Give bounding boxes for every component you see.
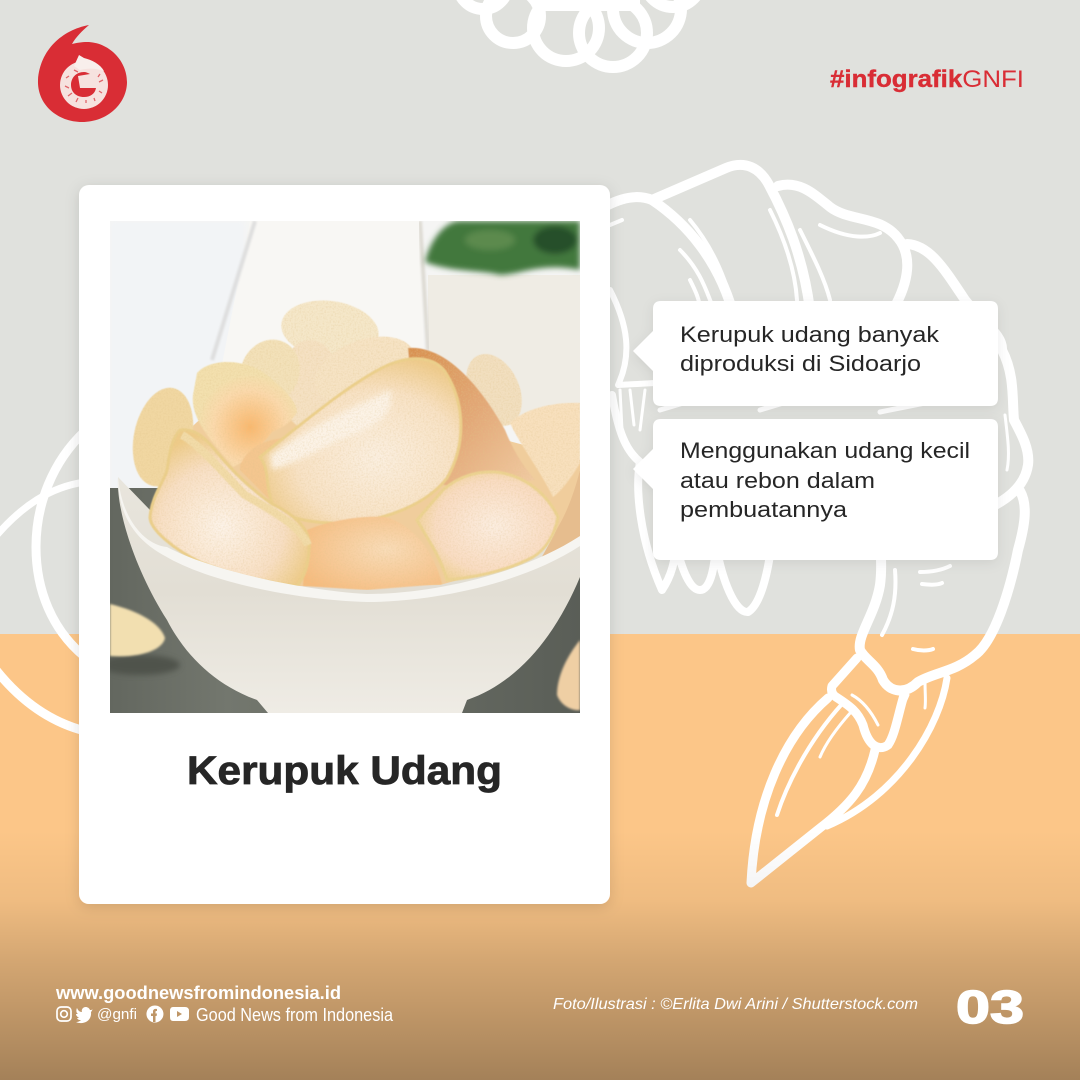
handle: @gnfi — [97, 1006, 137, 1023]
photo: cracker shadow — [100, 655, 180, 675]
card background — [79, 185, 610, 904]
photo: bowl — [118, 470, 580, 713]
photo credit: Foto/Ilustrasi : ©Erlita Dwi Arini / Shutterstock.com — [553, 996, 918, 1013]
hashtag: #infografik GNFI — [830, 66, 1024, 93]
logo: white garuda ring — [60, 55, 108, 109]
background: upper grey area — [0, 0, 1080, 634]
photo: wooden planks — [210, 221, 580, 416]
panel: photo card — [79, 185, 610, 904]
logo: red swirl — [38, 25, 127, 122]
icon: twitter — [76, 1007, 93, 1023]
photo: bowl rim — [118, 477, 580, 602]
footer: website: www.goodnewsfromindonesia.id — [55, 982, 341, 1003]
icon: instagram — [57, 1007, 71, 1021]
callout: ingredients: atau rebon dalam — [680, 468, 875, 493]
callout: ingredients: pembuatannya — [680, 497, 848, 522]
page number: 03 — [956, 981, 1024, 1033]
lower shading gradient — [0, 830, 1080, 1080]
photo: dark table — [110, 488, 580, 713]
footer: social row — [57, 1005, 394, 1025]
callout: production location — [633, 301, 998, 406]
photo: crackers — [124, 294, 580, 590]
callout: ingredients: Menggunakan udang kecil — [680, 438, 970, 463]
page name: Good News from Indonesia — [196, 1005, 394, 1025]
logo — [38, 25, 127, 122]
callout: ingredients — [633, 419, 998, 560]
illustration: fist holding paint brush — [606, 165, 1028, 883]
icon: youtube — [170, 1007, 189, 1021]
background: lower orange area — [0, 634, 1080, 1080]
card title: Kerupuk Udang — [187, 749, 502, 793]
photo: cracker mass — [192, 420, 580, 586]
photo: loose cracker left — [110, 604, 165, 656]
decoration: curves at left — [0, 431, 85, 731]
decoration: rings at top — [458, 0, 702, 67]
icon: facebook — [146, 1006, 163, 1022]
photo: prawn crackers in a white bowl — [100, 221, 580, 713]
photo: green leaves — [425, 221, 580, 275]
callout: production location: Kerupuk udang banyak — [680, 322, 940, 347]
photo: loose cracker right — [557, 640, 580, 710]
callout: production location: diproduksi di Sidoarjo — [680, 351, 921, 376]
